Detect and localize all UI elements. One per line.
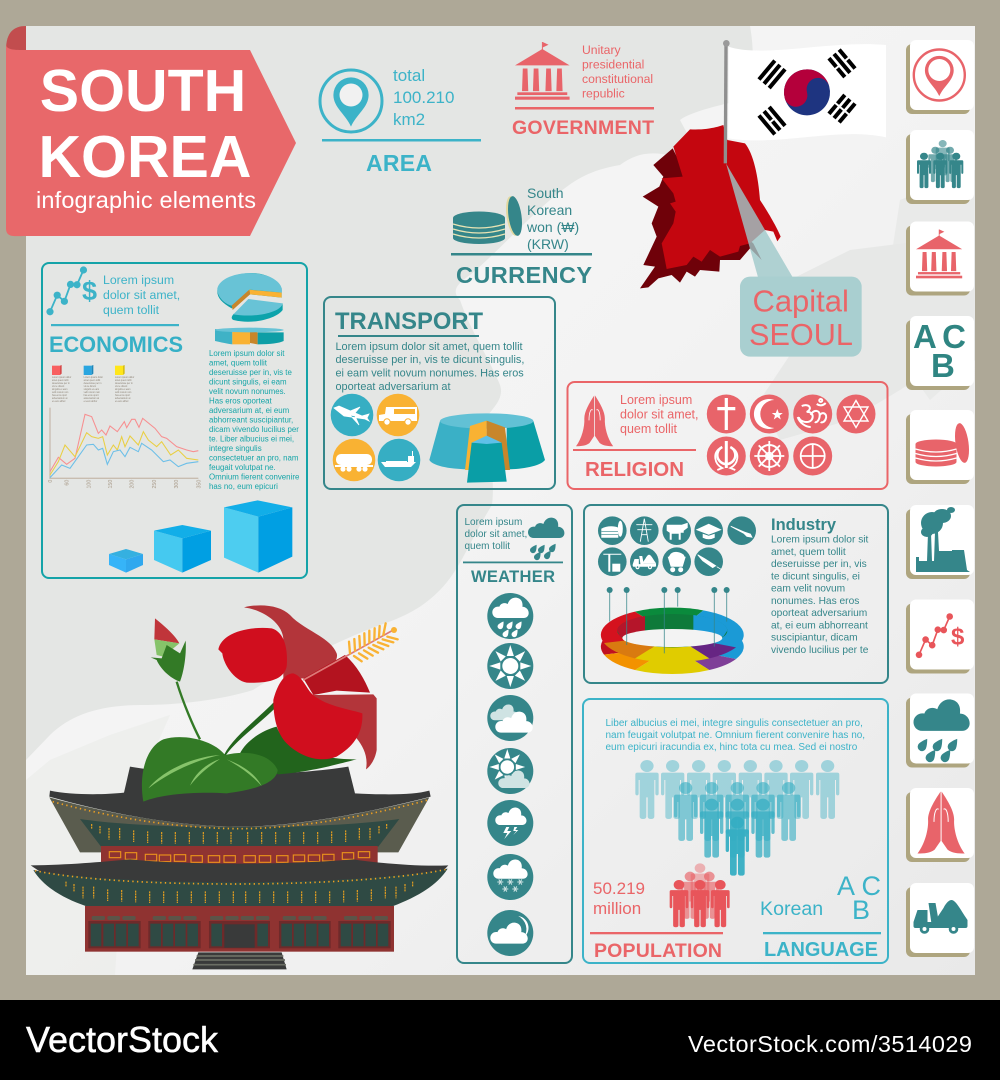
panel: religion <box>568 382 888 489</box>
icon: red people group <box>670 863 730 927</box>
panel: weather: WEATHER <box>471 568 555 586</box>
text block: te. Liber albucius ei mei, <box>209 434 294 444</box>
chart legend: adversarium at <box>115 397 131 400</box>
map of South Korea <box>640 125 781 288</box>
area block: AREA <box>366 150 432 176</box>
area block: 100.210 <box>393 88 454 107</box>
chart legend: adversarium at <box>84 397 99 400</box>
icon: star of David <box>836 394 876 434</box>
government block: constitutional <box>582 72 653 86</box>
callout: Capital Seoul: Capital <box>752 284 849 319</box>
government block: republic <box>582 86 625 100</box>
panel: transport <box>324 297 555 489</box>
panel: population and language: LANGUAGE <box>764 939 878 961</box>
government block: presidential <box>582 58 644 72</box>
government block: Unitary <box>582 43 622 57</box>
panel: transport: TRANSPORT <box>335 308 484 335</box>
line chart: 300 <box>174 480 180 489</box>
icon: clouds <box>487 695 533 741</box>
panel: population and language: Korean <box>760 898 823 920</box>
title banner: infographic elements <box>36 187 256 213</box>
chart legend: vis te dicunt <box>52 385 65 388</box>
panel: population and language: A C <box>837 871 881 901</box>
panel: industry: amet, quem tollit <box>771 547 846 558</box>
icon: coins <box>453 195 524 244</box>
chart legend: amet quem tollit <box>84 379 100 382</box>
area block: total <box>393 66 425 85</box>
sidebar tile: language: A C <box>913 318 966 355</box>
icon: graduation cap <box>694 516 723 545</box>
line chart: 200 <box>130 480 136 489</box>
line chart: 0 <box>48 480 54 483</box>
chart legend: velit novum non <box>84 391 101 394</box>
footer bar <box>0 1000 1000 1080</box>
panel: weather <box>457 505 572 963</box>
text block: adversarium at, ei eum <box>209 406 290 415</box>
sidebar tile: economy trend <box>906 600 974 674</box>
chart legend: ei eum abhor <box>52 400 66 403</box>
people pictogram <box>635 760 839 876</box>
panel: population and language: Liber albucius ei mei, integre singulis consectetuer an pro, <box>606 718 863 729</box>
sidebar tile: location <box>906 40 974 114</box>
text block: abhorreant suscipiantur, <box>209 416 293 424</box>
icon: sun behind cloud <box>487 748 533 794</box>
line chart: 60 <box>65 480 71 486</box>
panel: weather: dolor sit amet, <box>464 529 527 540</box>
footer bar: VectorStock.com/3514029 <box>688 1031 972 1057</box>
panel: weather: quem tollit <box>464 541 510 552</box>
text block: consectetuer an pro, nam <box>209 454 299 462</box>
panel: transport: Lorem ipsum dolor sit amet, quem tollit <box>336 341 523 353</box>
chart legend: singulis ei eam <box>52 389 67 391</box>
sidebar tile: praying hands <box>906 788 974 862</box>
icon: circled cross <box>793 436 832 476</box>
icon: bus <box>377 394 419 436</box>
text block: has no, eum epicuri <box>209 482 278 491</box>
panel: population and language: 50.219 <box>593 879 645 898</box>
icon: sun <box>487 643 533 689</box>
panel: transport: ei eam velit novum nonumes. Has eros <box>336 368 524 380</box>
map and flag <box>640 40 886 357</box>
text block <box>209 349 300 491</box>
line chart: 150 <box>108 480 114 489</box>
icon: snow <box>487 854 533 900</box>
icon: shipbuilding <box>598 516 627 545</box>
icon: cross <box>707 394 746 434</box>
chart legend: has eros oport <box>52 394 67 397</box>
panel: industry: Lorem ipsum dolor sit <box>771 534 869 546</box>
icon: location pin <box>320 70 382 132</box>
government block: GOVERNMENT <box>512 117 654 139</box>
sidebar tile: factory <box>906 505 974 579</box>
icon: rain <box>487 593 533 639</box>
sidebar tile: economy trend: $ <box>951 624 965 650</box>
panel: religion: RELIGION <box>585 458 684 481</box>
title banner: KOREA <box>38 124 252 190</box>
currency block: South <box>527 185 564 201</box>
panel: transport: deseruisse per in, vis te dicunt singulis, <box>336 354 524 366</box>
chart legend: deseruisse per in <box>115 382 133 385</box>
panel: industry <box>584 505 888 683</box>
sidebar tile: language: B <box>931 347 955 384</box>
icon: tanker wagon <box>333 439 375 481</box>
sidebar tile: rain <box>906 694 974 768</box>
text block: deseruisse per in, vis te <box>209 368 293 377</box>
icon: airplane <box>331 394 373 436</box>
icon: dharma wheel <box>750 436 789 476</box>
icon: khanda <box>707 436 746 476</box>
line chart: 350 <box>196 480 202 489</box>
panel: population and language: million <box>593 899 641 918</box>
icon: power pylon <box>630 516 659 545</box>
sidebar tile: language <box>906 316 974 390</box>
illustration: Korean palace <box>31 767 448 969</box>
chart legend: vis te dicunt <box>115 385 128 388</box>
chart legend: singulis ei eam <box>84 389 99 391</box>
panel: industry: at, ei eum abhorreant <box>771 620 868 631</box>
panel: industry: eam velit novum <box>771 584 845 594</box>
icon: rifle <box>727 516 756 545</box>
icon: mine cart <box>662 547 691 576</box>
chart legend: has eros oport <box>115 394 130 397</box>
panel: economics: dolor sit amet, <box>103 288 180 302</box>
chart legend: Lorem ipsum dolor <box>52 376 72 379</box>
panel: religion: quem tollit <box>620 422 677 436</box>
text block: Omnium fierent convenire <box>209 472 300 482</box>
chart legend: amet quem tollit <box>115 379 132 382</box>
panel: economics <box>42 263 307 578</box>
text block: Lorem ipsum dolor sit <box>209 349 285 358</box>
chart legend: velit novum non <box>52 391 69 394</box>
government block <box>512 42 654 139</box>
ring chart <box>601 587 744 674</box>
icon: ship <box>378 439 420 481</box>
title banner: SOUTH <box>40 58 246 124</box>
panel: population and language: B <box>852 895 870 925</box>
cubes <box>109 500 292 573</box>
chart legend: Lorem ipsum dolor <box>115 376 135 379</box>
panel: religion: dolor sit amet, <box>620 408 699 422</box>
currency block: (KRW) <box>527 236 569 252</box>
icon: praying hands <box>576 396 613 446</box>
chart legend: amet quem tollit <box>52 379 69 382</box>
panel: economics: quem tollit <box>103 303 160 317</box>
icon: om <box>793 394 832 434</box>
illustration: hibiscus flower <box>142 605 398 802</box>
chart legend: has eros oport <box>84 394 99 397</box>
icon: syringe <box>694 547 723 576</box>
panel: weather: Lorem ipsum <box>464 517 522 528</box>
currency block: won (₩) <box>526 219 579 235</box>
icon: rain cloud <box>528 518 564 561</box>
pie chart <box>217 273 283 322</box>
text block: dicunt singulis, ei eam <box>209 378 287 386</box>
text block: integre singulis <box>209 444 262 453</box>
icon: trend and dollar: $ <box>82 276 97 306</box>
bar segment <box>215 328 284 344</box>
icon: trend and dollar <box>46 266 97 315</box>
panel: economics: ECONOMICS <box>49 332 183 357</box>
chart legend: adversarium at <box>52 397 68 400</box>
sidebar tile: coins <box>906 410 974 484</box>
sidebar tile: government <box>906 222 974 296</box>
icon: crescent and star <box>750 394 789 434</box>
icon: crane <box>598 547 627 576</box>
footer bar: VectorStock <box>26 1019 219 1060</box>
panel: industry: oporteat adversarium <box>771 608 867 619</box>
line chart: 100 <box>86 480 92 489</box>
text block: Has eros oporteat <box>209 396 273 406</box>
chart legend <box>52 365 135 403</box>
icon: cow <box>662 516 691 545</box>
panel: population and language <box>583 699 888 963</box>
sidebar tile: people <box>906 130 974 204</box>
text block: amet, quem tollit <box>209 358 268 368</box>
chart legend: deseruisse per in <box>84 382 102 385</box>
panel: religion: Lorem ipsum <box>620 393 692 407</box>
chart legend: Lorem ipsum dolor <box>84 376 103 379</box>
icon: dump truck <box>630 547 659 576</box>
panel: industry: nonumes. Has eros <box>771 596 859 607</box>
text block: velit novum nonumes. <box>209 387 286 396</box>
panel: industry: suscipiantur, dicam <box>771 632 858 644</box>
callout: Capital Seoul: SEOUL <box>749 318 853 352</box>
panel: industry: Industry <box>771 516 837 534</box>
currency block: Korean <box>527 202 572 218</box>
chart legend: ei eum abhor <box>115 400 129 403</box>
line chart <box>48 408 202 489</box>
title banner <box>6 26 296 236</box>
icon: government building <box>515 42 570 100</box>
currency block: CURRENCY <box>456 262 592 288</box>
panel: population and language: eum epicuri iracundia ex, hinc tota cu mea. Sed ei nostro <box>606 742 858 753</box>
chart legend: singulis ei eam <box>115 389 130 391</box>
icon: moon and cloud <box>487 910 533 956</box>
line chart: 250 <box>152 480 158 489</box>
chart legend: deseruisse per in <box>52 382 70 385</box>
chart legend: vis te dicunt <box>84 385 96 388</box>
panel: transport: oporteat adversarium at <box>336 381 451 393</box>
panel: industry: vivendo lucilius per te <box>771 645 869 656</box>
text block: feugait volutpat ne. <box>209 463 276 472</box>
area block: km2 <box>393 110 425 129</box>
panel: population and language: nam feugait volutpat ne. Omnium fierent convenire has no, <box>606 730 865 741</box>
panel: population and language: POPULATION <box>594 940 722 962</box>
cylinder segment chart <box>429 413 545 483</box>
area block <box>320 66 481 176</box>
panel: economics: Lorem ipsum <box>103 273 174 287</box>
flag of South Korea <box>723 40 886 163</box>
sidebar tile: dump truck <box>906 883 974 957</box>
callout: Capital Seoul <box>726 163 862 357</box>
chart legend: velit novum non <box>115 391 132 394</box>
chart legend: ei eum abhor <box>84 400 97 403</box>
currency block <box>451 185 592 288</box>
panel: industry: te dicunt singulis, ei <box>771 571 860 582</box>
icon: thunderstorm <box>487 800 533 846</box>
text block: dicam vivendo lucilius per <box>209 425 299 434</box>
panel: industry: deseruisse per in, vis <box>771 559 867 570</box>
